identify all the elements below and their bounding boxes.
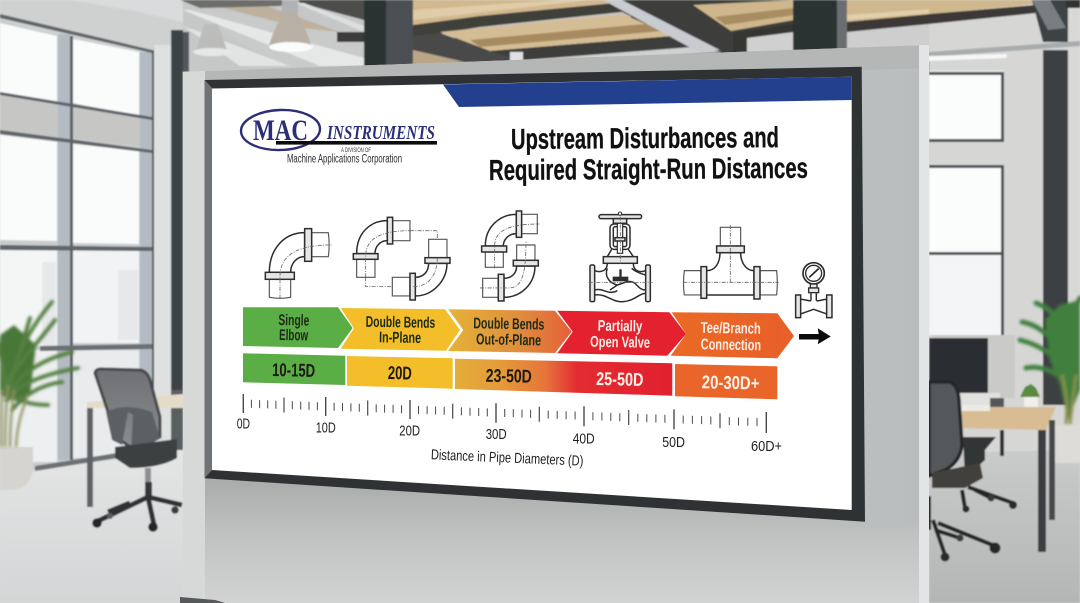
bar: 20-30D+: 20-30D+ (702, 371, 760, 394)
chevron: double bends out-of-plane: Out-of-Plane (476, 331, 541, 349)
left office windows (0, 0, 230, 470)
chevron: single elbow: Single (278, 312, 310, 330)
chevron row: disturbance types (243, 307, 794, 358)
right large plant (1020, 298, 1080, 463)
axis labels: 0D (237, 416, 250, 432)
axis labels: 10D (316, 420, 336, 436)
axis labels: 50D (662, 435, 685, 451)
left potted plant (0, 302, 78, 490)
icon: tee branch connection (683, 225, 779, 299)
chevron: double bends out-of-plane: Double Bends (473, 315, 545, 334)
logo: MAC Instruments: INSTRUMENTS (326, 122, 435, 144)
bar: 20-30D+ (675, 364, 777, 399)
left desk and chair (87, 369, 183, 532)
title (489, 122, 808, 187)
title: Upstream Disturbances and (511, 122, 779, 156)
wood bays (413, 0, 615, 25)
bar: 10-15D (243, 353, 345, 385)
icon: double bends in-plane (353, 217, 450, 300)
ceiling (180, 0, 1036, 72)
bar: 23-50D and 25-50D: 25-50D (596, 368, 644, 390)
logo: MAC Instruments (240, 109, 437, 166)
chevron: double bends in-plane (341, 308, 460, 351)
title: Required Straight-Run Distances (489, 153, 808, 187)
chair back mesh (95, 369, 160, 450)
axis labels: 20D (399, 424, 420, 440)
axis labels: 30D (486, 427, 507, 443)
arrow: flow direction (799, 328, 831, 344)
chevron: double bends out-of-plane (448, 309, 572, 353)
axis labels: 40D (573, 431, 595, 447)
bar: 23-50D and 25-50D (455, 359, 672, 396)
axis labels (237, 416, 782, 455)
icon: single elbow (265, 229, 332, 299)
icon: pressure gauge flow meter (796, 263, 832, 318)
bar: 20D (347, 356, 453, 389)
bar: 20D: 20D (388, 362, 412, 384)
ductwork and left ceiling (183, 0, 364, 72)
chevron: partially open valve: Open Valve (590, 334, 650, 352)
logo: MAC Instruments: Machine Applications Corporation (287, 154, 402, 166)
right windows (929, 70, 1004, 335)
axis labels: 60D+ (751, 439, 782, 455)
chevron: single elbow: Elbow (279, 327, 309, 345)
right office (928, 0, 1080, 603)
bar: 10-15D: 10-15D (272, 359, 315, 381)
chevron: double bends in-plane: In-Plane (379, 329, 421, 347)
icon: globe valve (589, 212, 653, 302)
blue header band (443, 77, 852, 107)
distance ruler (237, 394, 782, 470)
chevron: partially open valve (557, 311, 686, 356)
logo: MAC Instruments: MAC (253, 114, 308, 147)
right desk and monitor (929, 335, 1056, 552)
sign frame (205, 67, 865, 522)
right floor (929, 450, 1080, 603)
display wall panel (180, 45, 929, 603)
axis title: Distance in Pipe Diameters (D) (431, 447, 584, 470)
right chair (929, 382, 1017, 562)
chevron: tee/branch connection: Tee/Branch (701, 320, 761, 338)
chevron: partially open valve: Partially (598, 318, 643, 335)
chevron: tee/branch connection (671, 312, 794, 358)
pendant lamps (193, 0, 313, 56)
chevron: tee/branch connection: Connection (701, 336, 761, 354)
bar: 23-50D and 25-50D: 23-50D (486, 365, 532, 387)
chevron: single elbow (243, 307, 353, 348)
logo: MAC Instruments: A DIVISION OF (341, 148, 371, 154)
icon: double bends out-of-plane (480, 211, 539, 301)
ruler ticks (243, 394, 766, 433)
left floor (0, 450, 183, 603)
framed sign (205, 67, 865, 522)
sign white board (212, 77, 852, 510)
distance bars (243, 353, 777, 399)
chevron: double bends in-plane: Double Bends (366, 314, 435, 332)
